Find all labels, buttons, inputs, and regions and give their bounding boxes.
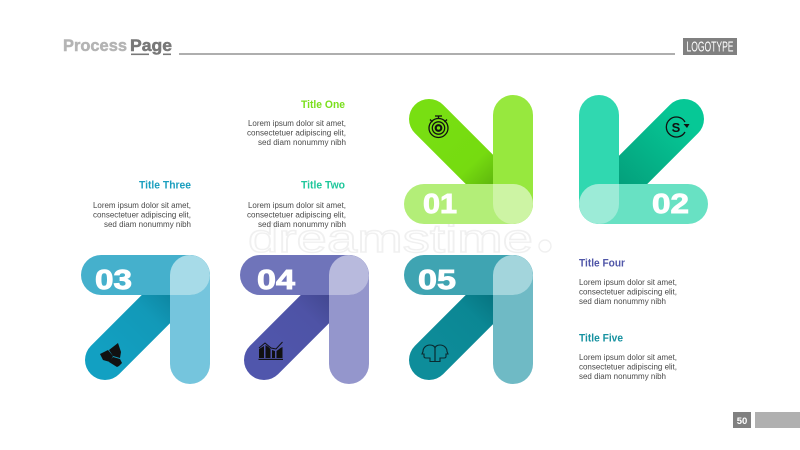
icon: two heads <box>422 345 448 362</box>
text block: title five <box>579 332 677 381</box>
text block: title two <box>247 180 346 229</box>
arrow 03 <box>81 255 210 384</box>
text block: title four: Title Four <box>579 258 626 270</box>
text block: title two: Lorem ipsum dolor sit amet, <box>248 200 346 210</box>
header rule <box>179 53 675 55</box>
logotype badge: LOGOTYPE <box>686 40 734 56</box>
arrow 01 <box>404 95 533 224</box>
text block: title two: sed diam nonummy nibh <box>258 219 346 229</box>
icon: bar chart <box>258 342 283 360</box>
number 01: 01 <box>423 188 457 219</box>
text block: title three: Title Three <box>139 180 191 192</box>
title: Page <box>130 36 172 55</box>
arrow 04 <box>240 255 369 384</box>
footer bar <box>755 412 800 428</box>
watermark: dreamstime <box>248 217 533 261</box>
number 04: 04 <box>257 264 296 295</box>
text block: title four <box>579 258 677 306</box>
page number: 50 <box>737 416 747 427</box>
text block: title three: Lorem ipsum dolor sit amet, <box>93 200 191 210</box>
text block: title five: Lorem ipsum dolor sit amet, <box>579 352 677 362</box>
text block: title four: consectetuer adipiscing elit, <box>579 286 677 296</box>
page number <box>733 412 751 428</box>
text block: title four: sed diam nonummy nibh <box>579 296 666 306</box>
text block: title five: sed diam nonummy nibh <box>579 371 666 381</box>
text block: title three <box>93 180 191 229</box>
number 03: 03 <box>95 264 132 295</box>
text block: title five: Title Five <box>579 332 623 344</box>
text block: title two: consectetuer adipiscing elit, <box>247 210 346 220</box>
title: Process <box>63 36 127 55</box>
icon: cycle trefoil <box>100 343 122 367</box>
text block: title three: consectetuer adipiscing elit, <box>93 210 191 220</box>
text block: title one: sed diam nonummy nibh <box>258 137 346 147</box>
text block: title three: sed diam nonummy nibh <box>104 219 191 229</box>
text block: title five: consectetuer adipiscing elit, <box>579 362 677 372</box>
logotype badge <box>683 38 737 56</box>
icon: stopwatch <box>429 116 448 138</box>
number 05: 05 <box>418 264 456 295</box>
icon: dollar cycle: S <box>672 120 681 135</box>
text block: title one: Title One <box>301 99 345 111</box>
text block: title one: consectetuer adipiscing elit, <box>247 128 346 138</box>
text block: title one: Lorem ipsum dolor sit amet, <box>248 118 346 128</box>
text block: title four: Lorem ipsum dolor sit amet, <box>579 277 677 287</box>
arrow 02 <box>579 95 708 224</box>
title <box>63 36 172 55</box>
arrow 05 <box>404 255 533 384</box>
watermark <box>248 191 551 261</box>
text block: title two: Title Two <box>301 180 345 192</box>
number 02: 02 <box>652 188 689 219</box>
text block: title one <box>247 99 346 147</box>
